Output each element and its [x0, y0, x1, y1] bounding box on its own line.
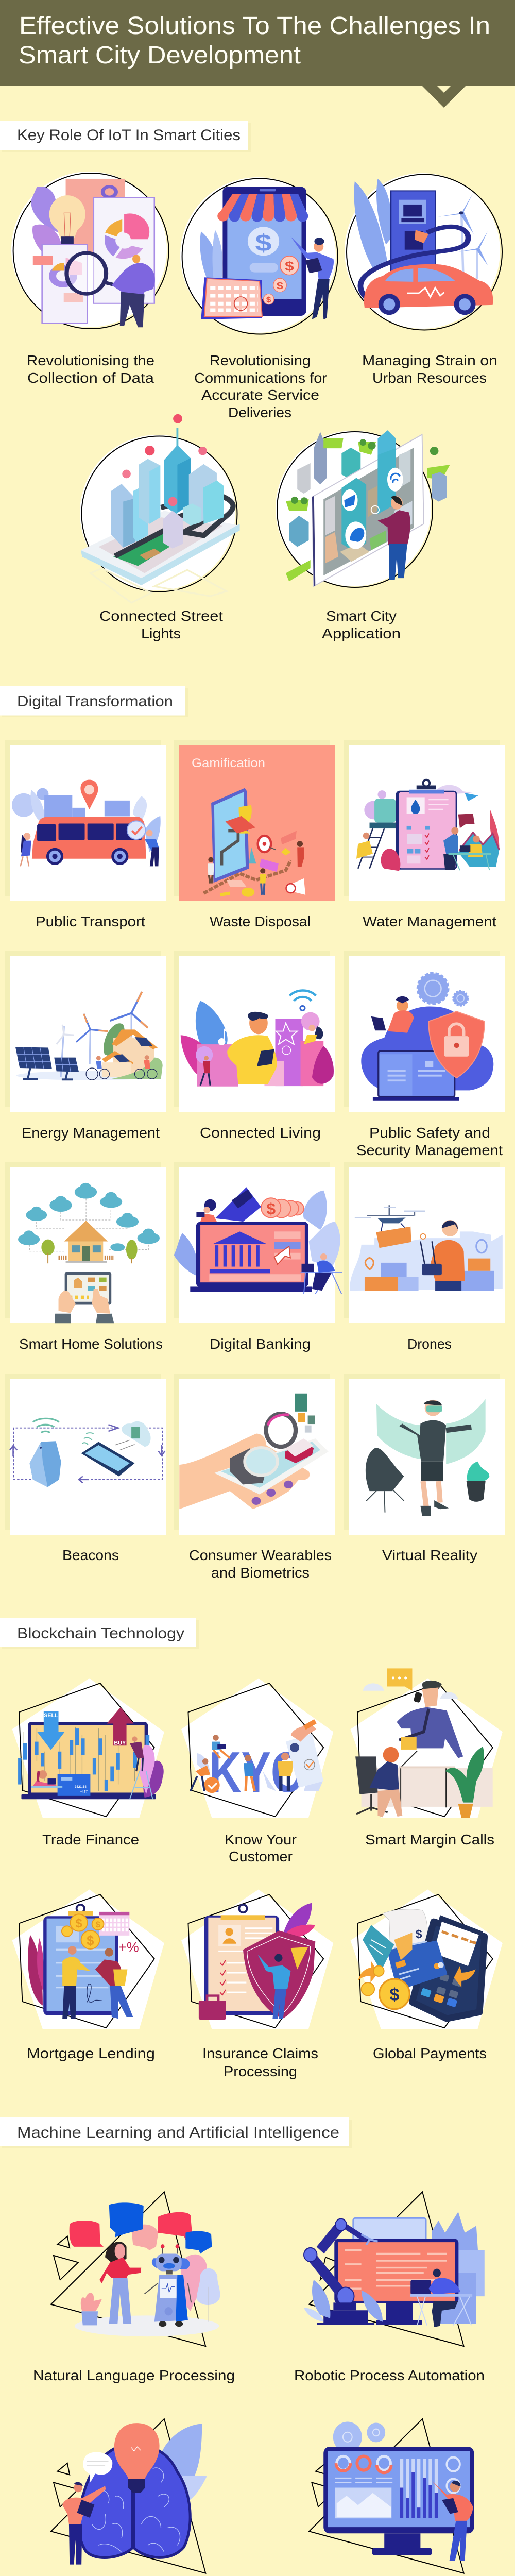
label: Customer — [229, 1849, 293, 1865]
card: Cognitive Machine Learning — [37, 2419, 231, 2576]
card: Revolutionising Communications — [180, 177, 338, 420]
illustration: payments calculator — [351, 1890, 503, 2029]
card: Data Science — [309, 2419, 474, 2576]
label: Smart Margin Calls — [365, 1832, 494, 1848]
illustration: renewable home — [15, 992, 163, 1080]
illustration: mortgage clipboard: $ — [75, 1917, 82, 1930]
illustration: smart home — [18, 1183, 160, 1323]
label: Collection of Data — [27, 370, 154, 386]
label: Know Your — [225, 1832, 297, 1848]
illustration: mortgage clipboard: +% — [118, 1940, 139, 1955]
illustration: shop on smartphone: $ — [285, 259, 294, 274]
card: Managing Strain on Urban Resources — [345, 173, 502, 386]
label: Natural Language Processing — [33, 2367, 235, 2383]
heading: Machine Learning and Artificial Intelligence — [0, 2117, 352, 2148]
illustration: payments calculator: $ — [416, 1927, 422, 1941]
card: Revolutionising the Collection of Data — [11, 172, 169, 386]
illustration: robotic arm and screen — [304, 2192, 485, 2346]
label: Revolutionising the — [27, 352, 154, 368]
illustration: mortgage clipboard: $ — [87, 1934, 94, 1948]
label — [356, 1125, 503, 1158]
illustration: digital banking laptop — [174, 1187, 342, 1294]
illustration: water clipboard — [356, 780, 499, 871]
label: Public Safety and — [369, 1125, 490, 1141]
illustration: isometric smart city block — [81, 414, 240, 603]
label: Consumer Wearables — [189, 1547, 332, 1563]
card: Smart Home Solutions — [5, 1162, 166, 1352]
label — [194, 352, 327, 420]
panel: Key Role Of IoT In Smart Cities — [0, 121, 502, 641]
label: Connected Street — [99, 608, 223, 624]
label: Mortgage Lending — [27, 2045, 155, 2061]
label — [225, 1832, 297, 1865]
heading: Machine Learning and Artificial Intelligence: Machine Learning and Artificial Intelligence — [17, 2124, 339, 2141]
heading: Blockchain Technology: Blockchain Technology — [17, 1625, 184, 1642]
card: Drones — [344, 1162, 505, 1352]
card: Smart City Application — [276, 430, 450, 641]
illustration: security shield cloud — [361, 973, 493, 1101]
card: Digital Banking — [174, 1162, 342, 1352]
card: Know Your Customer — [181, 1679, 333, 1865]
illustration: digital banking laptop: $ — [266, 1199, 276, 1218]
card: Public Safety and Security Management — [344, 951, 505, 1158]
illustration: connected living — [181, 990, 334, 1087]
label: Urban Resources — [372, 370, 487, 386]
illustration: trading laptop — [12, 1679, 164, 1818]
label: Water Management — [363, 913, 496, 929]
illustration: shop on smartphone — [200, 187, 334, 319]
label: Lights — [141, 625, 181, 641]
title banner: Smart City Development — [19, 42, 301, 69]
label — [27, 352, 154, 386]
illustration: KYC letters — [181, 1679, 333, 1818]
illustration: analytics monitor — [309, 2419, 474, 2573]
illustration: KYC letters: KYC — [209, 1740, 303, 1804]
label — [189, 1547, 332, 1581]
illustration: trading laptop: SELL — [44, 1713, 58, 1719]
illustration: trading laptop: -4.17 — [80, 1790, 88, 1793]
caption: Gamification: Gamification — [192, 756, 265, 770]
card: Trade Finance — [12, 1679, 164, 1848]
label: Virtual Reality — [382, 1547, 477, 1563]
card: Connected Living — [174, 951, 335, 1141]
label: Managing Strain on — [362, 352, 497, 368]
card: Virtual Reality — [344, 1374, 505, 1563]
card: Consumer Wearables and Biometrics — [174, 1374, 335, 1581]
label: Global Payments — [373, 2045, 487, 2061]
card: Waste Disposal — [174, 740, 335, 929]
card: Smart Margin Calls — [351, 1668, 503, 1848]
label — [202, 2045, 318, 2079]
illustration: shop on smartphone: $ — [255, 230, 272, 257]
heading: Blockchain Technology — [0, 1618, 199, 1649]
illustration: wearables on phone — [179, 1394, 329, 1509]
illustration: shop on smartphone: $ — [266, 296, 271, 304]
illustration: gamification phone — [203, 788, 305, 897]
card: Mortgage Lending — [12, 1890, 164, 2061]
panel: Machine Learning and Artificial Intelligence — [0, 2117, 485, 2576]
label: Trade Finance — [42, 1832, 139, 1848]
illustration: mortgage clipboard: $ — [95, 1920, 100, 1929]
illustration: VR user — [366, 1399, 489, 1516]
illustration: insurance shield — [181, 1890, 333, 2029]
title banner — [0, 0, 515, 108]
label: Beacons — [62, 1547, 119, 1563]
card: Public Transport — [5, 740, 166, 929]
heading: Key Role Of IoT In Smart Cities — [0, 121, 251, 152]
illustration: phone-call office — [351, 1668, 503, 1818]
label: Communications for — [194, 370, 327, 386]
card: Connected Street Lights — [80, 414, 240, 641]
label: Accurate Service — [201, 387, 319, 403]
label: Revolutionising — [210, 352, 311, 368]
illustration: brain with bulb — [51, 2419, 207, 2573]
label: Robotic Process Automation — [294, 2367, 485, 2383]
illustration: payments calculator: $ — [389, 1985, 400, 2005]
label: Waste Disposal — [210, 913, 311, 929]
illustration: trading laptop: BUY — [114, 1740, 126, 1746]
panel: Digital Transformation — [0, 686, 505, 1581]
label: Connected Living — [200, 1125, 321, 1141]
panel: Blockchain Technology — [0, 1618, 503, 2079]
label: Digital Banking — [210, 1336, 311, 1352]
card: Beacons — [5, 1374, 166, 1563]
label: Processing — [224, 2063, 297, 2079]
illustration: robot conversation — [51, 2192, 220, 2346]
illustration: mortgage clipboard — [12, 1890, 164, 2029]
label: Security Management — [356, 1142, 503, 1158]
title banner: Effective Solutions To The Challenges In — [19, 12, 490, 40]
illustration: data collection — [31, 179, 155, 327]
illustration: electric car charging — [354, 179, 493, 315]
label: Smart City — [326, 608, 397, 624]
label: Deliveries — [228, 404, 291, 420]
card: Insurance Claims Processing — [181, 1890, 333, 2079]
label: Energy Management — [22, 1125, 160, 1141]
card: Water Management — [344, 740, 505, 929]
heading: Digital Transformation: Digital Transformation — [17, 693, 173, 710]
card: Energy Management — [5, 951, 166, 1141]
label: Application — [322, 625, 401, 641]
label: Insurance Claims — [202, 2045, 318, 2061]
label: and Biometrics — [211, 1565, 310, 1581]
card: Natural Language Processing — [33, 2192, 235, 2383]
label: Public Transport — [36, 913, 145, 929]
heading: Key Role Of IoT In Smart Cities: Key Role Of IoT In Smart Cities — [17, 127, 241, 144]
illustration: person using city tablet — [286, 430, 450, 586]
label — [362, 352, 497, 386]
illustration: beacon loop — [10, 1418, 165, 1487]
heading: Digital Transformation — [0, 686, 188, 717]
illustration: trading laptop: 2421.54 — [75, 1785, 87, 1789]
label: Drones — [407, 1336, 452, 1352]
card: Robotic Process Automation — [294, 2192, 485, 2383]
label — [322, 608, 401, 641]
illustration: shop on smartphone: $ — [277, 281, 283, 292]
label — [99, 608, 223, 641]
illustration: smart bus — [12, 780, 161, 866]
illustration: delivery drone — [350, 1205, 503, 1291]
label: Smart Home Solutions — [19, 1336, 163, 1352]
card: Global Payments — [351, 1890, 503, 2061]
